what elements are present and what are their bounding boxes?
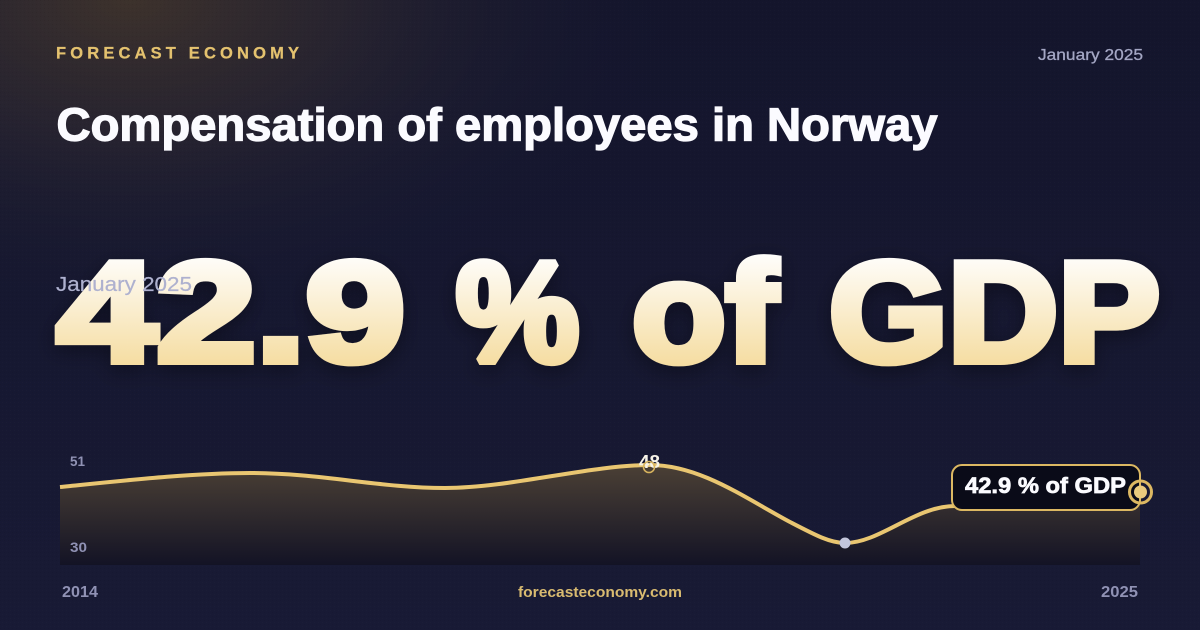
peak marker bbox=[644, 462, 654, 472]
footer website: forecasteconomy.com bbox=[518, 584, 682, 601]
date top right: January 2025 bbox=[1038, 47, 1143, 64]
x axis end year: 2025 bbox=[1101, 584, 1138, 601]
date overlay: January 2025 bbox=[56, 274, 192, 296]
low marker bbox=[840, 538, 850, 548]
chart line bbox=[60, 465, 955, 543]
big value: % bbox=[456, 233, 579, 392]
value callout: 42.9 % of GDP bbox=[965, 473, 1126, 498]
big value bbox=[57, 233, 1160, 392]
title: Compensation of employees in Norway bbox=[56, 98, 938, 150]
chart area fill bbox=[60, 465, 1140, 565]
x axis start year: 2014 bbox=[62, 584, 98, 601]
y axis max: 51 bbox=[70, 453, 85, 469]
value callout bbox=[952, 465, 1140, 510]
big value: of bbox=[632, 233, 778, 392]
brand label: FORECAST ECONOMY bbox=[56, 44, 299, 62]
y axis min: 30 bbox=[70, 539, 87, 555]
big value: GDP bbox=[829, 233, 1160, 392]
end marker bbox=[1130, 481, 1152, 503]
area chart bbox=[60, 452, 1152, 565]
peak label: 48 bbox=[639, 452, 660, 472]
big value: 42.9 bbox=[57, 233, 405, 392]
